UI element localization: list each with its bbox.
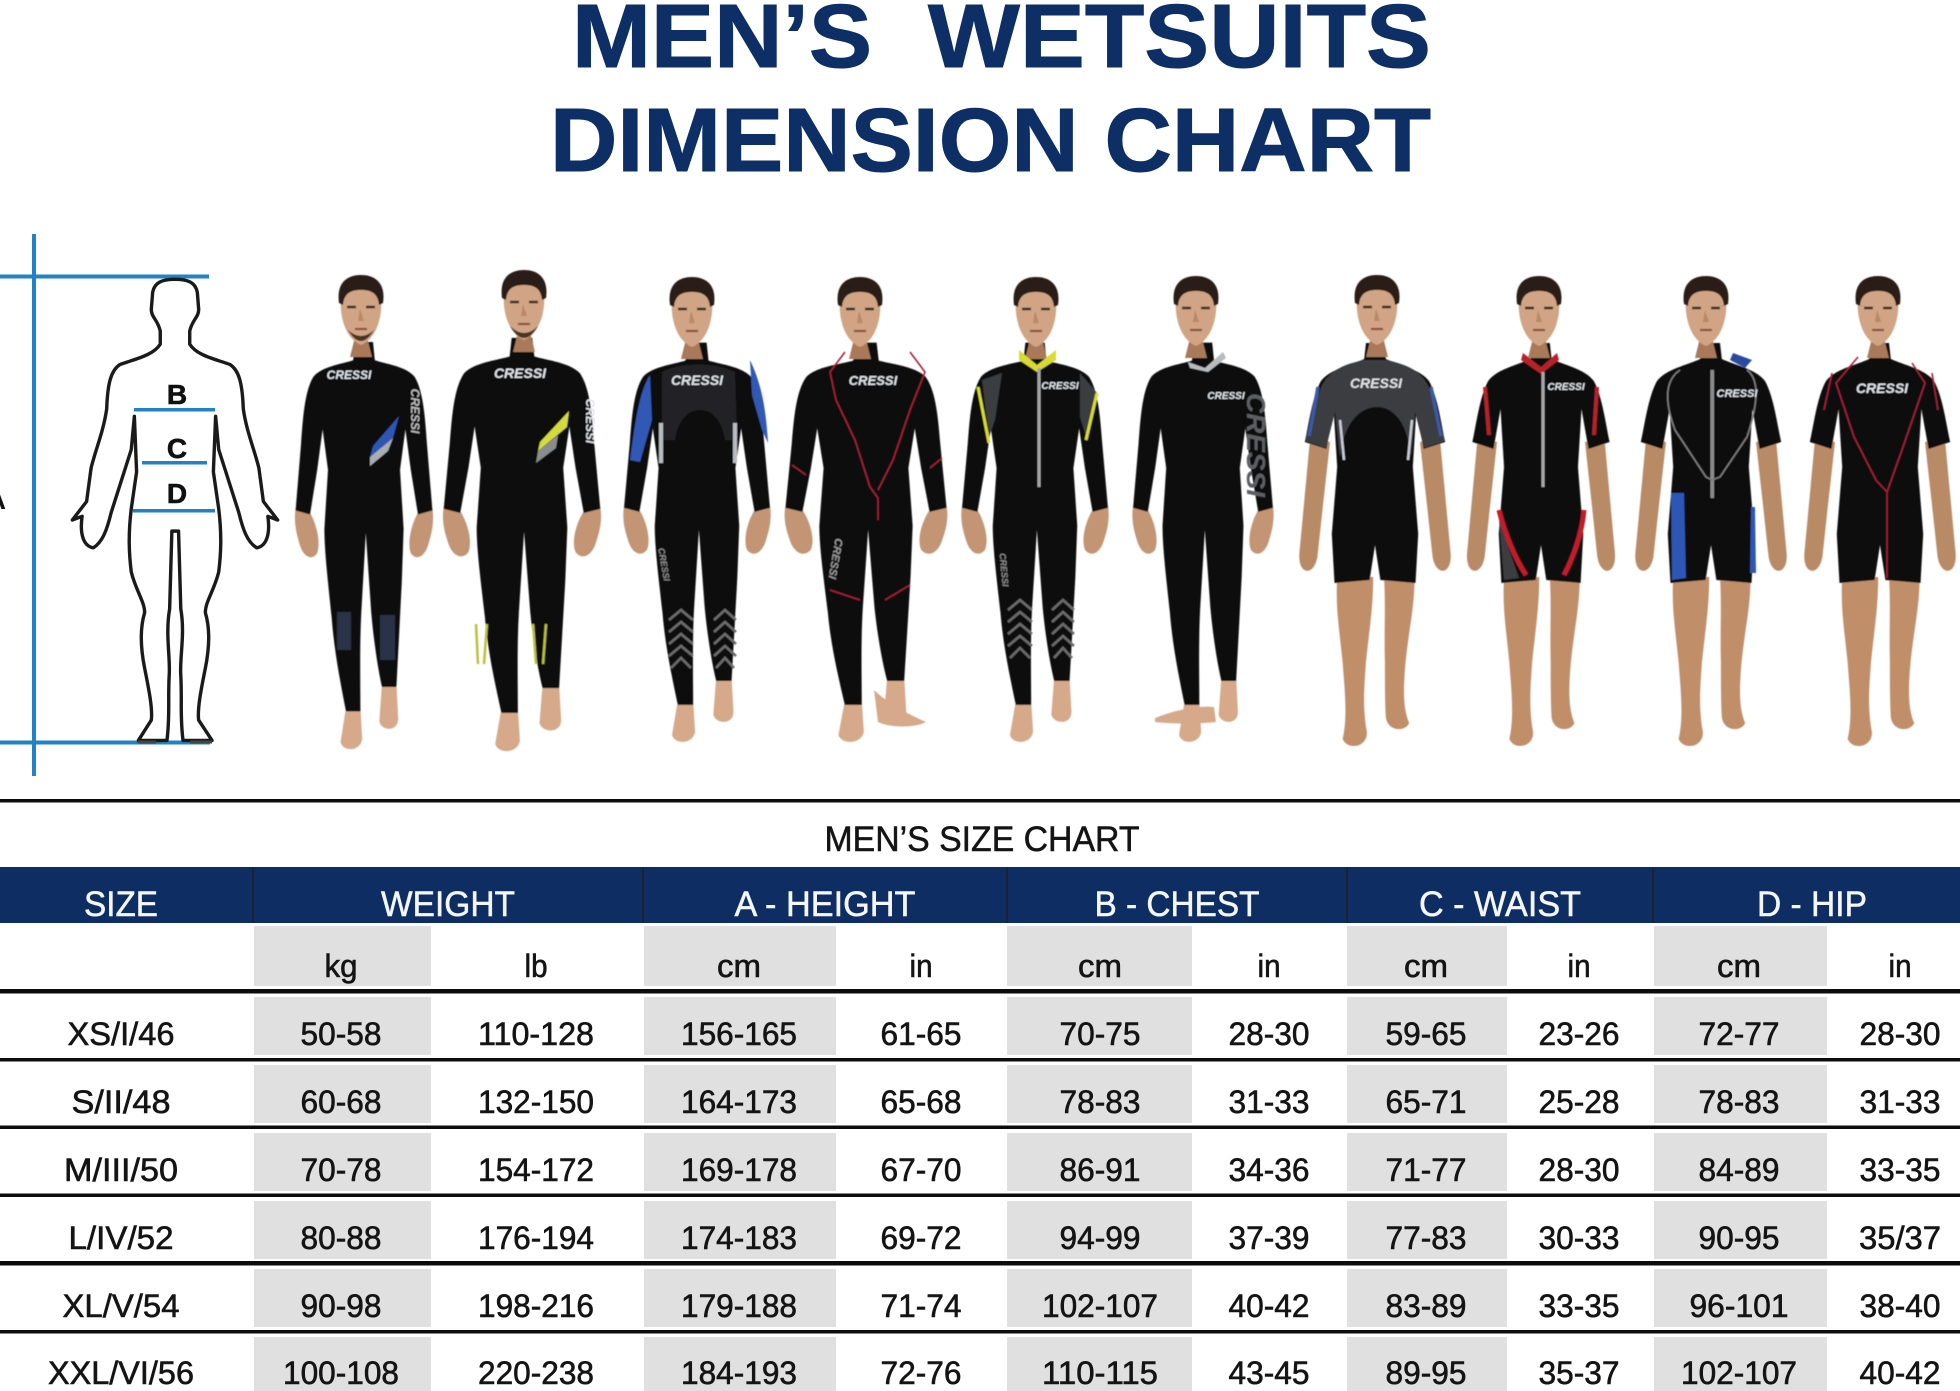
row XS/I/46: 23-26	[1538, 1016, 1620, 1052]
row M/III/50: 67-70	[880, 1152, 962, 1188]
row L/IV/52: 90-95	[1698, 1220, 1780, 1256]
row XL/V/54	[62, 1288, 1940, 1324]
hip measurement D	[133, 478, 215, 512]
row L/IV/52: 77-83	[1386, 1220, 1466, 1256]
row S/II/48: 78-83	[1060, 1084, 1140, 1120]
model 4: full suit with red seams	[785, 277, 947, 742]
model 6: stirrup full suit with grey collar: CRESSI	[1207, 391, 1245, 402]
row XXL/VI/56	[48, 1355, 1940, 1391]
row XS/I/46: 156-165	[681, 1016, 797, 1052]
row XL/V/54: 40-42	[1228, 1288, 1310, 1324]
row L/IV/52: 94-99	[1060, 1220, 1140, 1256]
row XS/I/46	[68, 1016, 1940, 1052]
row S/II/48: 31-33	[1228, 1084, 1310, 1120]
row L/IV/52: 35/37	[1859, 1220, 1941, 1256]
row XXL/VI/56: 184-193	[681, 1355, 797, 1391]
model 6: stirrup full suit with grey collar	[1132, 276, 1274, 742]
row XS/I/46: 72-77	[1698, 1016, 1780, 1052]
table header bar: C - WAIST	[1419, 885, 1581, 924]
model 2: full suit with yellow accent: CRESSI	[583, 399, 597, 444]
model 7: shorty with grey yoke	[1299, 275, 1451, 746]
title line 2: DIMENSION CHART	[550, 91, 1431, 191]
model 5: full suit with yellow trim and zipper	[961, 277, 1109, 742]
table header bar	[0, 867, 1960, 924]
model 3: full suit with blue sleeves	[623, 277, 771, 742]
row XS/I/46: 28-30	[1860, 1016, 1940, 1052]
table header bar: B - CHEST	[1094, 885, 1260, 924]
row L/IV/52	[68, 1220, 1941, 1256]
row XL/V/54: 198-216	[478, 1288, 594, 1324]
wetsuit models row	[295, 270, 1956, 751]
row L/IV/52: 69-72	[880, 1220, 962, 1256]
row S/II/48: 31-33	[1860, 1084, 1940, 1120]
unit sub-header row: lb	[524, 948, 548, 984]
row XS/I/46: 28-30	[1228, 1016, 1310, 1052]
unit sub-header row: cm	[717, 948, 761, 984]
row M/III/50: 154-172	[478, 1152, 594, 1188]
model 1: full suit with blue accent: CRESSI	[408, 389, 422, 434]
row XL/V/54: 96-101	[1690, 1288, 1788, 1324]
foot marks	[138, 740, 212, 744]
row XL/V/54: 179-188	[681, 1288, 797, 1324]
row XXL/VI/56: 110-115	[1042, 1355, 1158, 1391]
section divider	[0, 799, 1960, 802]
model 3: full suit with blue sleeves: CRESSI	[671, 372, 724, 388]
model 9: shorty with blue sides and grey seams	[1635, 276, 1787, 746]
body outline	[72, 279, 278, 740]
row S/II/48: 132-150	[478, 1084, 594, 1120]
row XS/I/46: 61-65	[880, 1016, 962, 1052]
row S/II/48: 65-71	[1386, 1084, 1466, 1120]
row XL/V/54: 33-35	[1538, 1288, 1620, 1324]
chest measurement B: B	[167, 379, 187, 410]
row L/IV/52: 37-39	[1228, 1220, 1310, 1256]
table header bar: WEIGHT	[381, 885, 515, 924]
row M/III/50: 84-89	[1698, 1152, 1780, 1188]
row XXL/VI/56: 102-107	[1681, 1355, 1797, 1391]
row L/IV/52: 176-194	[478, 1220, 594, 1256]
row M/III/50: 28-30	[1538, 1152, 1620, 1188]
model 9: shorty with blue sides and grey seams: CRESSI	[1717, 388, 1758, 400]
row XL/V/54: 38-40	[1860, 1288, 1940, 1324]
row XS/I/46: 50-58	[300, 1016, 382, 1052]
row XXL/VI/56: 40-42	[1860, 1355, 1940, 1391]
row XXL/VI/56: 43-45	[1228, 1355, 1310, 1391]
unit sub-header row: cm	[1717, 948, 1761, 984]
row XL/V/54: 102-107	[1042, 1288, 1158, 1324]
row M/III/50: 86-91	[1060, 1152, 1140, 1188]
model 5: full suit with yellow trim and zipper: CRESSI	[1041, 381, 1079, 392]
row XS/I/46: 70-75	[1060, 1016, 1140, 1052]
row M/III/50: 34-36	[1228, 1152, 1310, 1188]
model 1: full suit with blue accent: CRESSI	[327, 368, 372, 382]
unit sub-header row: kg	[324, 948, 358, 984]
model 5: full suit with yellow trim and zipper: CRESSI	[998, 553, 1010, 587]
height measurement lines	[0, 234, 210, 776]
row M/III/50	[64, 1152, 1940, 1188]
row S/II/48: 60-68	[300, 1084, 382, 1120]
model 1: full suit with blue accent	[295, 275, 433, 749]
row M/III/50: 70-78	[300, 1152, 382, 1188]
row XXL/VI/56: 89-95	[1386, 1355, 1466, 1391]
row XS/I/46: 59-65	[1386, 1016, 1466, 1052]
size table	[0, 867, 1960, 1391]
row XL/V/54: XL/V/54	[62, 1288, 180, 1324]
row XXL/VI/56: 35-37	[1538, 1355, 1620, 1391]
model 3: full suit with blue sleeves: CRESSI	[656, 547, 672, 582]
title line 1	[572, 0, 1431, 87]
grey column bands	[254, 926, 1827, 1391]
row XXL/VI/56: XXL/VI/56	[48, 1355, 194, 1391]
unit sub-header row: in	[1258, 948, 1280, 984]
unit sub-header row: cm	[1404, 948, 1448, 984]
row XXL/VI/56: 220-238	[478, 1355, 594, 1391]
row XXL/VI/56: 100-108	[283, 1355, 399, 1391]
model 2: full suit with yellow accent: CRESSI	[494, 365, 547, 381]
model 8: shorty with red trim and zipper: CRESSI	[1547, 382, 1585, 393]
row M/III/50: M/III/50	[64, 1152, 178, 1188]
unit sub-header row: in	[1888, 948, 1912, 984]
table header bar: SIZE	[84, 885, 158, 924]
row M/III/50: 169-178	[681, 1152, 797, 1188]
row S/II/48	[72, 1084, 1940, 1120]
row XXL/VI/56: 72-76	[880, 1355, 962, 1391]
hip measurement D: D	[167, 478, 187, 509]
row L/IV/52: 80-88	[300, 1220, 382, 1256]
row L/IV/52: 30-33	[1538, 1220, 1620, 1256]
row XL/V/54: 71-74	[880, 1288, 962, 1324]
row S/II/48: 78-83	[1698, 1084, 1780, 1120]
table heading: MEN’S SIZE CHART	[824, 820, 1140, 859]
model 7: shorty with grey yoke: CRESSI	[1350, 375, 1403, 391]
row S/II/48: 65-68	[880, 1084, 962, 1120]
chest measurement B	[134, 379, 215, 412]
model 2: full suit with yellow accent	[443, 270, 601, 751]
unit sub-header row	[324, 948, 1912, 984]
waist measurement C	[142, 433, 207, 464]
row L/IV/52: 174-183	[681, 1220, 797, 1256]
row XS/I/46: 110-128	[478, 1016, 594, 1052]
model 8: shorty with red trim and zipper	[1467, 276, 1615, 746]
unit sub-header row: in	[1568, 948, 1590, 984]
table header bar: A - HEIGHT	[734, 885, 916, 924]
unit sub-header row: in	[910, 948, 932, 984]
row S/II/48: 164-173	[681, 1084, 797, 1120]
row XS/I/46: XS/I/46	[68, 1016, 174, 1052]
model 10: shorty with red seams	[1804, 276, 1956, 746]
body measurement diagram	[0, 234, 278, 776]
row M/III/50: 71-77	[1386, 1152, 1466, 1188]
row XL/V/54: 90-98	[300, 1288, 382, 1324]
title: Men's Wetsuits Dimension Chart	[550, 0, 1431, 191]
model 4: full suit with red seams: CRESSI	[849, 373, 898, 388]
row L/IV/52: L/IV/52	[68, 1220, 174, 1256]
model 4: full suit with red seams: CRESSI	[825, 537, 844, 581]
row S/II/48: 25-28	[1538, 1084, 1620, 1120]
model 10: shorty with red seams: CRESSI	[1856, 380, 1909, 396]
row M/III/50: 33-35	[1860, 1152, 1940, 1188]
unit sub-header row: cm	[1078, 948, 1122, 984]
model 6: stirrup full suit with grey collar: CRESSI	[1241, 393, 1271, 498]
row S/II/48: S/II/48	[72, 1084, 170, 1120]
row XL/V/54: 83-89	[1386, 1288, 1466, 1324]
table header bar: D - HIP	[1757, 885, 1867, 924]
waist measurement C: C	[167, 433, 187, 464]
